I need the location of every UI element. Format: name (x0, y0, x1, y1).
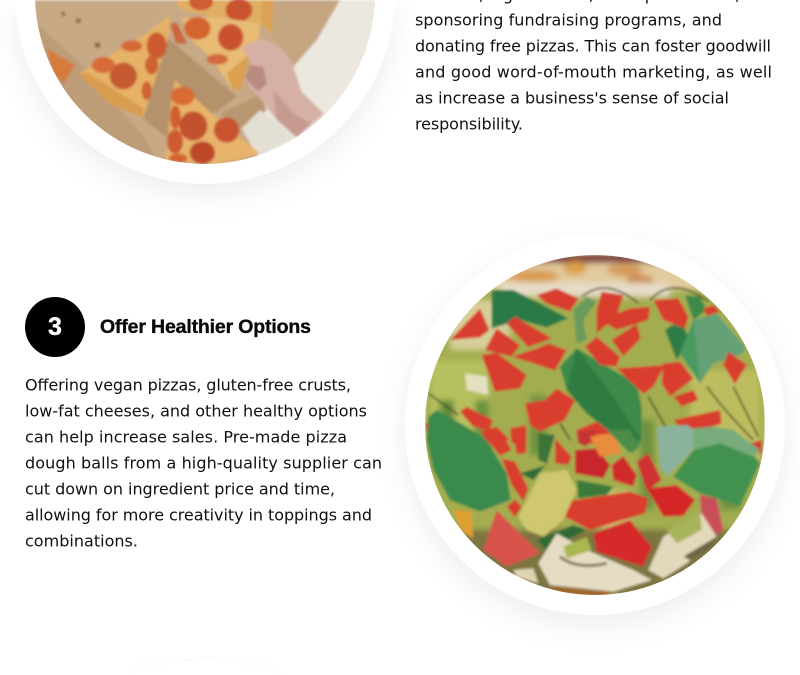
crust and base tones (425, 255, 765, 595)
green patches and pesto (520, 460, 550, 480)
step 3 description text (25, 376, 382, 550)
photo circle: vegan pizza with tomato and basil (405, 235, 785, 615)
tomatoes (425, 288, 747, 443)
vegetable pizza photo (425, 255, 765, 597)
photo circle: pepperoni pizza in a box (15, 0, 395, 184)
step 3 description text: can help increase sales. Pre-made pizza (25, 428, 347, 446)
step 2 description text (continued): donating free pizzas. This can foster goodwill (415, 36, 771, 56)
step 3 description text: Offering vegan pizzas, gluten-free crusts, (25, 376, 351, 394)
step 2 description text (continued): and good word-of-mouth marketing, as well (415, 62, 772, 82)
next photo circle (top edge) (133, 661, 277, 675)
step 3 description text: combinations. (25, 532, 138, 550)
step 3 description text: allowing for more creativity in toppings and (25, 506, 372, 524)
step 2 description text (continued): responsibility. (415, 114, 523, 134)
bottom slice (166, 80, 260, 165)
eggplant slices (518, 470, 577, 537)
step 3 description text: cut down on ingredient price and time, (25, 480, 335, 498)
step 2 description text (continued): as increase a business's sense of social (415, 88, 729, 108)
left crust slice (78, 15, 170, 117)
basil leaves (492, 290, 568, 328)
step 2 description text (continued) (415, 0, 772, 134)
number badge 3 (25, 297, 85, 357)
hand (242, 38, 324, 137)
number badge 3: 3 (48, 313, 62, 341)
pizza slices photo (33, 0, 380, 167)
white ring (15, 0, 395, 184)
step 3 description text: low-fat cheeses, and other healthy options (25, 402, 367, 420)
step 3 description text: dough balls from a high-quality supplier can (25, 454, 382, 472)
dark grill lines (428, 288, 758, 440)
lower basil leaves (427, 410, 511, 512)
white ring (405, 235, 785, 615)
heading: Offer Healthier Options: Offer Healthier Options (100, 316, 311, 338)
lower tomatoes (453, 430, 762, 567)
step 2 description text (continued): sponsoring fundraising programs, and (415, 10, 722, 30)
upper slices (176, 0, 264, 27)
